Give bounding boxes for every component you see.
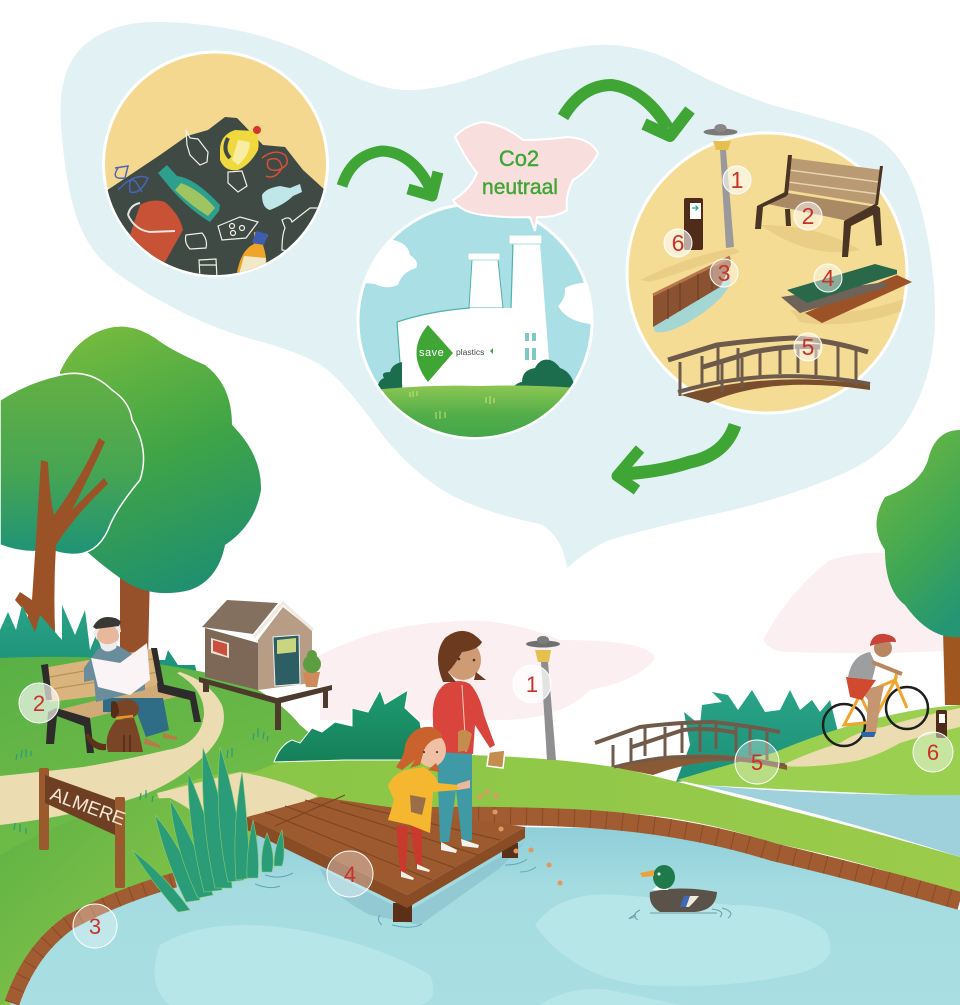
dock side xyxy=(247,817,525,908)
park badge 6 xyxy=(913,732,953,772)
park badge 6: 6 xyxy=(927,740,939,765)
ground: middle hill xyxy=(150,752,960,895)
man torso xyxy=(84,644,145,702)
newspaper xyxy=(91,643,150,695)
sign post: park xyxy=(936,710,947,738)
save plastics logo: plastics xyxy=(456,347,484,357)
mother face xyxy=(459,659,474,660)
reeds xyxy=(132,747,284,912)
mother zipper xyxy=(462,685,466,752)
ripples xyxy=(255,859,536,927)
man head xyxy=(97,625,119,647)
number badges: park xyxy=(19,665,953,948)
man reading newspaper xyxy=(84,617,177,748)
bushes: teal behind bridge xyxy=(676,690,840,782)
badge 5: 5 xyxy=(802,334,814,360)
product 1: lamp post xyxy=(704,124,738,248)
clouds xyxy=(366,240,418,288)
product 4: decking boards xyxy=(781,264,912,323)
dog xyxy=(85,699,143,752)
grass tufts xyxy=(14,728,268,834)
duck xyxy=(629,865,731,920)
bushes xyxy=(512,360,575,388)
yellow jug xyxy=(220,126,261,170)
product 5: bridge xyxy=(668,338,870,403)
bush: middle green xyxy=(274,690,428,762)
mother xyxy=(433,631,505,853)
save plastics logo: save xyxy=(419,347,444,359)
process background blob xyxy=(60,22,935,568)
light blue bottle xyxy=(262,184,302,210)
badge 1: 1 xyxy=(731,167,743,193)
girl shoes xyxy=(401,864,430,880)
dock top xyxy=(247,797,525,895)
girl xyxy=(388,727,470,880)
green bottle xyxy=(158,165,220,222)
man hair xyxy=(93,625,121,640)
pond xyxy=(10,826,960,1005)
ripples xyxy=(629,908,731,920)
bushes: teal behind bench xyxy=(0,605,198,680)
park badge 2: 2 xyxy=(33,691,45,716)
pond highlight right xyxy=(535,894,830,986)
mother head xyxy=(445,640,481,680)
badge 6: 6 xyxy=(672,230,684,256)
mother hair xyxy=(438,631,486,682)
toast held by girl xyxy=(410,795,426,815)
arrow: factory to products xyxy=(563,85,690,136)
factory building xyxy=(397,235,549,390)
tree: right tree xyxy=(876,430,960,705)
sketched plastics xyxy=(186,130,322,278)
park badge 3: 3 xyxy=(89,914,101,939)
pond wall: left sheet piling xyxy=(12,880,175,1003)
man beard xyxy=(99,640,118,652)
hut front wall xyxy=(258,607,312,690)
pond wall: right sheet piling xyxy=(430,816,960,901)
red scribble xyxy=(262,152,287,177)
circle: recycled products xyxy=(627,124,915,413)
park badge 2 xyxy=(19,683,59,723)
park badge 4: 4 xyxy=(344,862,356,887)
badge 2: 2 xyxy=(802,203,814,229)
bag of bread xyxy=(487,750,505,768)
park badge 5 xyxy=(735,740,779,784)
save plastics logo xyxy=(416,325,493,382)
product 3: sheet piling xyxy=(653,257,731,327)
rider leg xyxy=(860,685,884,733)
sign: ALMERE: ALMERE xyxy=(47,784,128,830)
cloud: pink left xyxy=(320,620,655,720)
water xyxy=(653,275,731,332)
orange bottle xyxy=(236,231,268,273)
bicycle frame xyxy=(844,672,907,725)
ground: left meadow xyxy=(0,657,345,1005)
arrow: waste to factory xyxy=(342,151,438,196)
rider helmet xyxy=(870,634,896,646)
ground: footpath xyxy=(0,672,224,825)
ground: beige path patch xyxy=(157,772,318,822)
rider arm xyxy=(872,662,902,674)
girl head xyxy=(416,733,446,767)
girl hair xyxy=(396,727,442,772)
badge 4: 4 xyxy=(822,265,835,291)
product 6: sign post xyxy=(684,198,703,250)
rider shirt xyxy=(848,652,876,680)
pond highlight left xyxy=(154,925,433,1005)
girl coat xyxy=(388,767,458,833)
bridge: park xyxy=(595,722,787,775)
hut platform xyxy=(199,677,332,730)
cloud: pink right xyxy=(763,552,960,653)
ground: front meadow xyxy=(0,798,215,1005)
badge 3 xyxy=(710,259,738,287)
grass xyxy=(381,386,570,437)
park badge 5: 5 xyxy=(751,750,763,775)
product 2: bench xyxy=(755,155,883,257)
man hat xyxy=(93,617,121,629)
hut window xyxy=(211,638,229,658)
water: side channel xyxy=(700,785,960,857)
badge 2 xyxy=(794,202,822,230)
mother jeans xyxy=(437,750,472,842)
badge 6 xyxy=(664,229,692,257)
dock legs xyxy=(393,843,518,922)
speech cloud: Co2 neutraal: neutraal xyxy=(482,176,558,199)
red bucket xyxy=(128,201,183,262)
girl face xyxy=(424,751,437,753)
hut roof xyxy=(202,600,278,634)
badge 1 xyxy=(723,166,751,194)
breadcrumbs xyxy=(480,792,560,883)
hut door xyxy=(273,635,300,686)
waste mound xyxy=(108,117,324,275)
path: right cycle path xyxy=(780,708,960,767)
circle: factory xyxy=(355,204,600,445)
hut left wall xyxy=(205,628,258,690)
hut roof trim xyxy=(254,603,313,637)
mother shoes xyxy=(441,839,479,853)
potted plant xyxy=(303,650,321,687)
dock shadow xyxy=(320,842,525,925)
man legs xyxy=(103,698,169,737)
pond highlight bottom xyxy=(540,989,680,1005)
park badge 1 xyxy=(513,665,551,703)
speech cloud: Co2 neutraal xyxy=(453,122,598,231)
lamp post: park xyxy=(526,636,560,760)
park badge 3 xyxy=(73,904,117,948)
park badge 4 xyxy=(327,851,373,897)
bicycle wheels xyxy=(823,704,865,746)
badge 3: 3 xyxy=(718,260,730,286)
blue scribble xyxy=(115,166,148,192)
circle: plastic waste pile xyxy=(100,52,330,290)
ground shadows xyxy=(640,225,915,324)
badge 4 xyxy=(814,264,842,292)
rider shoe xyxy=(861,732,876,737)
windows xyxy=(525,333,536,360)
front tree trunk xyxy=(15,438,108,688)
rider shorts xyxy=(846,677,876,700)
tree: front tree xyxy=(0,373,144,688)
badge 5 xyxy=(794,333,822,361)
mother jacket xyxy=(433,681,495,754)
cyclist xyxy=(823,634,928,746)
park badge 1: 1 xyxy=(526,672,538,697)
number badges: products xyxy=(664,166,842,361)
ground: right bank xyxy=(677,705,960,797)
arrow: products to park xyxy=(617,425,735,490)
tree: big back tree xyxy=(60,327,261,660)
sign: ALMERE xyxy=(39,768,128,888)
toast held xyxy=(458,730,472,752)
bench: park xyxy=(41,648,201,753)
girl hand xyxy=(457,780,470,790)
dock xyxy=(247,795,525,922)
rider head xyxy=(874,639,892,657)
man shoes xyxy=(144,733,177,748)
hut xyxy=(199,600,332,730)
speech cloud: Co2 neutraal: Co2 xyxy=(499,146,539,171)
girl legs xyxy=(396,826,422,872)
